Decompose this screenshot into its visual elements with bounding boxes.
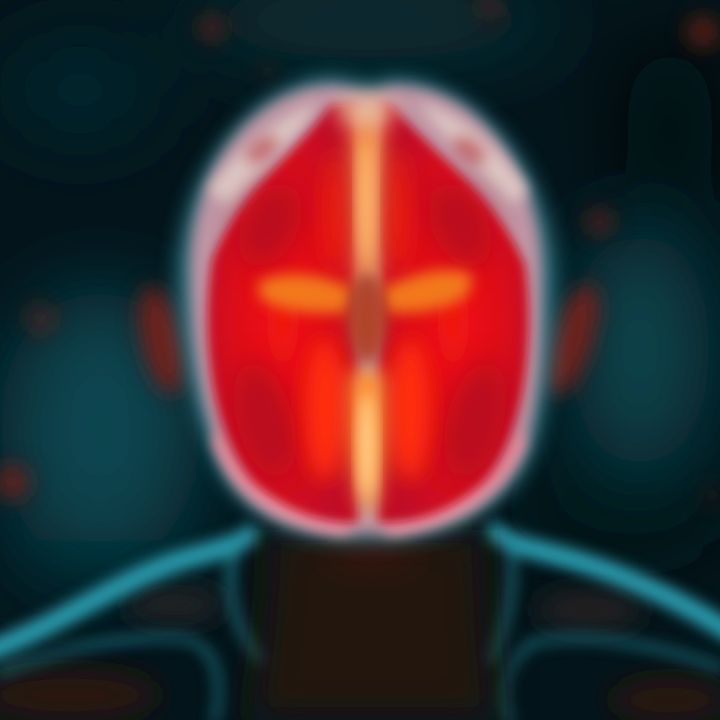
red patches in the upper rim [240,130,284,170]
cyan shoulder outlines [0,532,720,720]
red brain left [208,105,358,522]
pale skull rim [190,85,542,534]
central glowing fissure [336,96,396,518]
lower fissure highlight [359,393,375,497]
bright red glow near the centre [305,150,430,480]
skull patches [208,102,528,535]
orange cross arms [258,270,472,313]
shoulders [0,532,720,720]
darker folds [222,172,518,485]
head [176,76,556,541]
red brain right [378,105,529,522]
neck [248,530,498,720]
ears [131,279,609,401]
background red particles [0,0,720,505]
upper fissure highlight [359,140,373,260]
skull outer glow [176,76,556,541]
centre brown core [347,273,387,363]
